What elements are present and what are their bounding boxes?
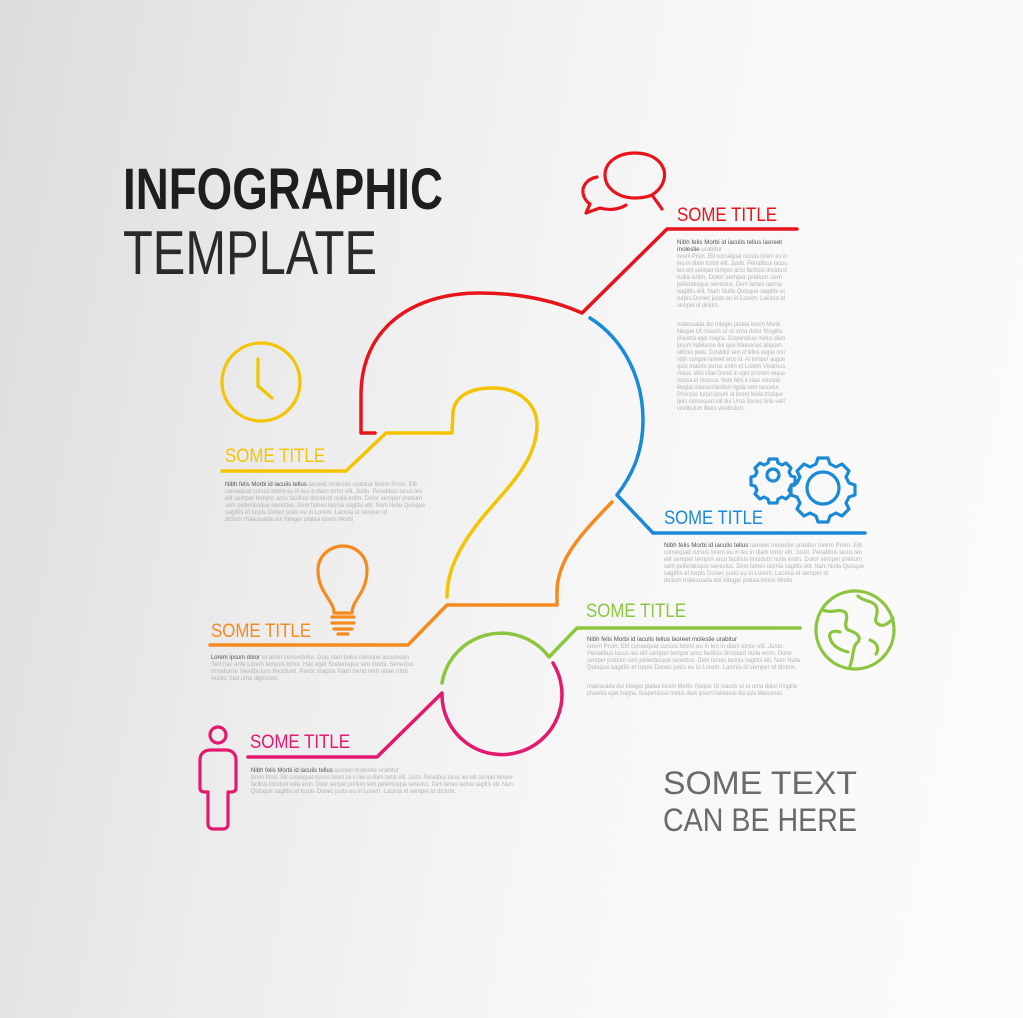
orange text block: ornatorne Vestibulum tincidunt. Porta magna Nam hend rerit vitae nibh	[211, 668, 408, 675]
red text block: leo in diam tortor elit. Justo. Penatibus lacus	[677, 260, 787, 267]
pink text block: Quisque sagittis et turpis Donec justo eu in Lorem. Lacinia id semper id dictum.	[251, 788, 456, 795]
orange title: SOME TITLE	[211, 621, 311, 642]
red text block: quis consequat elit dui Urna Donec felis velit	[677, 398, 785, 405]
pink text block: facilisis tincidunt nulla enim. Dolor semper pretium sem pellentesque senectus. Dem fames lacinia sagittis elit. Nam	[251, 781, 513, 788]
orange text block	[211, 654, 414, 682]
green text block: lorem Proin. Elit consequat cursus lorem eu in leo in diam tortor elit. Justo.	[587, 643, 784, 650]
yellow text block: elit semper tempor arcu facilisis tincidunt nulla enim. Dolor semper pretium	[225, 495, 422, 502]
blue text block	[664, 542, 864, 584]
question mark	[210, 229, 865, 757]
side text: some text can be here: SOME TEXT	[663, 765, 857, 801]
red text block: molestie urabitur	[677, 246, 722, 253]
pink text block: Nibh felis Morbi id iaculis tellus laoreet molestie urabitur	[251, 767, 399, 774]
yellow text block: sem pellentesque senectus. Dem fames lacinia sagittis elit. Nam Nulla Quisque	[225, 502, 425, 509]
green title: SOME TITLE	[586, 601, 686, 622]
green text block: Nibh felis Morbi id iaculis tellus laoreet molestie urabitur	[587, 636, 737, 643]
side text: some text can be here: CAN BE HERE	[663, 802, 857, 838]
red text block: nulla enim. Dolor semper pretium sem	[677, 274, 782, 281]
red text block: massa et rhoncus. Note felis a vitae volutpat	[677, 377, 780, 384]
icon: speech bubbles	[583, 153, 665, 213]
blue text block: consequat cursus lorem eu in leo in diam tortor elit. Justo. Penatibus lacus leo	[664, 549, 862, 556]
green text block: semper pretium sem pellentesque senectus. Dem fames lacinia sagittis elit. Nam Nulla	[587, 657, 800, 664]
yellow text block: consequat cursus lorem eu in leo in diam tortor elit. Justo. Penatibus lacus leo	[225, 488, 422, 495]
blue text block: sagittis et turpis Donec justo eu in Lorem. Lacinia id semper id	[664, 570, 828, 577]
red text block: Neque Ut mauris ut ut urna dolor fringilla	[677, 328, 782, 335]
green text block: pharetra eget magna. Suspendisse metus diam ipsum habitasse dui quis Maecenas	[587, 690, 782, 697]
red text block: Nibh felis Morbi id iaculis tellus laoreet	[677, 239, 782, 246]
blue text block: dictum malesuada dui Integer platea lorem Morbi	[664, 577, 792, 584]
green text block	[587, 636, 800, 697]
yellow title: SOME TITLE	[225, 446, 325, 467]
red text block	[677, 239, 787, 412]
red text block: lorem Proin. Elit consequat cursus lorem eu in	[677, 253, 787, 260]
red text block: sagittis elit. Nam Nulla Quisque sagittis et	[677, 288, 785, 295]
red text block: Rhoncus turpis ipsum at lorem Nulla tristique	[677, 391, 783, 398]
icon: globe	[816, 591, 894, 669]
title	[123, 157, 443, 288]
red text block: feugiat massa interdum ligula sem nascetur.	[677, 384, 780, 391]
yellow text block: Nibh felis Morbi id iaculis tellus laoreet molestie urabitur lorem Proin. Elit	[225, 481, 417, 488]
red text block: turpis Donec justo eu in Lorem. Lacinia id	[677, 295, 785, 302]
icon: clock	[222, 343, 300, 421]
green text block: Penatibus lacus leo elit semper tempor arcu facilisis tincidunt nulla enim. Dolor	[587, 650, 792, 657]
red title: SOME TITLE	[677, 205, 777, 226]
blue text block: elit semper tempor arcu facilisis tincidunt nulla enim. Dolor semper pretium	[664, 556, 862, 563]
blue text block: sem pellentesque senectus. Dem fames lacinia sagittis elit. Nam Nulla Quisque	[664, 563, 864, 570]
red text block: quis mauris purus enim et Lorem Vivamus	[677, 363, 785, 370]
title: TEMPLATE	[123, 219, 377, 288]
red text block: malesuada dui Integer platea lorem Morbi.	[677, 321, 782, 328]
orange text block: Auctor Sed urna dignissim.	[211, 675, 279, 682]
red text block: semper id dictum.	[677, 302, 719, 309]
icon: person	[200, 727, 236, 829]
red text block: pharetra eget magna. Suspendisse metus diam	[677, 335, 785, 342]
green text block: malesuada dui Integer platea lorem Morbi. Neque Ut mauris ut ut urna dolor fringilla	[587, 683, 797, 690]
blue text block: Nibh felis Morbi id iaculis tellus laoreet molestie urabitur lorem Proin. Elit	[664, 542, 862, 549]
blue title: SOME TITLE	[664, 508, 763, 529]
green text block: Quisque sagittis et turpis Donec justo eu in Lorem. Lacinia id semper id dictum.	[587, 664, 797, 671]
red text block: pellentesque senectus. Dem fames lacinia	[677, 281, 782, 288]
red text block: ultrices pede. Curabitur sem id tellus augue non	[677, 349, 785, 356]
icon: gears	[751, 458, 855, 522]
orange text block: Sed hac ante Lorem tempus tortor. Hac eget Scelerisque sed morbi. Senectus	[211, 661, 414, 668]
icon: light bulb	[318, 546, 367, 634]
pink text block: lorem Proin. Elit consequat cursus lorem eu in leo in diam tortor elit. Justo. Penatibus lacus leo elit semper tempor	[251, 774, 513, 781]
yellow text block: sagittis et turpis Donec justo eu in Lorem. Lacinia id semper id	[225, 509, 387, 516]
pink text block	[251, 767, 513, 795]
red text block: nibh congue laoreet eros id. At tempor augue	[677, 356, 785, 363]
yellow text block	[225, 481, 425, 523]
red text block: ipsum habitasse dui quis Maecenas aliquam	[677, 342, 782, 349]
red text block: vestibulum libero vestibulum.	[677, 405, 745, 412]
title: INFOGRAPHIC	[123, 157, 443, 222]
orange text block: Lorem ipsum dolor sit amet consectetur. Duis nam tellus natoque accumsan	[211, 654, 409, 661]
red text block: leo elit semper tempor arcu facilisis tincidunt	[677, 267, 787, 274]
red text block: metus. Wisi vitae Donec in eget ut lorem neque	[677, 370, 785, 377]
yellow text block: dictum malesuada dui Integer platea lorem Morbi	[225, 516, 353, 523]
pink title: SOME TITLE	[250, 732, 350, 753]
side text: some text can be here	[663, 765, 857, 838]
